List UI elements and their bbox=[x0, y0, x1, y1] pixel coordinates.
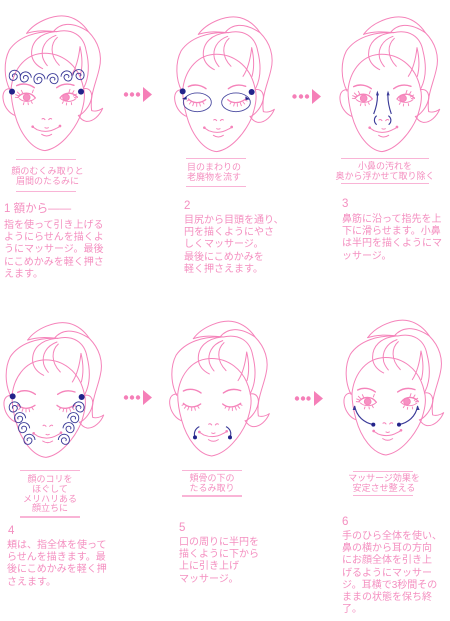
face 6: lift massage bbox=[344, 320, 444, 455]
step 5 text: 上に引き上げ bbox=[179, 561, 239, 572]
panel 5 caption bbox=[182, 470, 242, 497]
step 5 text: マッサージ。 bbox=[179, 574, 238, 585]
step 1 text: ようにらせんを描くよ bbox=[4, 232, 104, 243]
step 4 text: さえます。 bbox=[7, 577, 56, 588]
step 5 number: 5 bbox=[179, 522, 185, 534]
step 4 text: らせんを描きます。最 bbox=[7, 552, 106, 563]
panel 2 caption: 老廃物を流す bbox=[187, 172, 241, 182]
step 5 text bbox=[179, 536, 259, 585]
step 2 text: 軽く押さえます。 bbox=[184, 264, 263, 275]
step 6 number: 6 bbox=[342, 516, 348, 528]
step 6 text: ジ。耳横で3秒間その bbox=[342, 580, 437, 591]
step 2 text: しくマッサージ。 bbox=[184, 239, 264, 250]
panel 4 caption: 顔立ちに bbox=[32, 503, 68, 513]
step 5 text: 口の周りに半円を bbox=[179, 537, 259, 548]
arrow 1 bbox=[124, 87, 152, 102]
step 4 text: 後にこめかみを軽く押 bbox=[7, 564, 107, 575]
step 6 text: ままの状態を保ち終 bbox=[342, 592, 432, 603]
step 1 text bbox=[4, 219, 104, 280]
panel 1 caption: 眉間のたるみに bbox=[16, 176, 79, 186]
arrow 4 bbox=[295, 391, 323, 406]
step 3 number: 3 bbox=[342, 198, 348, 210]
arrow 2 bbox=[292, 89, 321, 104]
face 1: forehead massage bbox=[3, 16, 103, 151]
step 4 text: 頬は、指全体を使って bbox=[7, 540, 106, 551]
step 4 number: 4 bbox=[8, 525, 14, 537]
step 1 text: えます。 bbox=[4, 269, 43, 280]
step 2 text: 最後にこめかみを bbox=[184, 252, 264, 263]
step 3 text: ッサージ。 bbox=[342, 251, 392, 262]
panel 1 caption: 顔のむくみ取りと bbox=[11, 166, 84, 176]
step 1 number: 1 額から―― bbox=[4, 203, 71, 215]
face 2: eye massage bbox=[175, 17, 274, 152]
panel 4 caption: ほぐして bbox=[32, 484, 68, 494]
panel 3 caption: 奥から浮かせて取り除く bbox=[335, 171, 434, 181]
step 3 text: 下に滑らせます。小鼻 bbox=[342, 226, 441, 237]
step 5 text: 描くように下から bbox=[179, 549, 259, 560]
step 3 text bbox=[342, 213, 442, 262]
spirals and pressure points on forehead bbox=[9, 70, 84, 95]
step 6 text bbox=[342, 530, 442, 615]
panel 6 caption bbox=[348, 471, 420, 496]
step 4 text bbox=[7, 539, 107, 588]
step 2 number: 2 bbox=[184, 200, 190, 212]
panel 1 caption bbox=[11, 159, 84, 192]
arrow 3 bbox=[124, 390, 152, 405]
face 4: cheek massage bbox=[4, 323, 104, 457]
step 6 text: にお顔全体を引き上 bbox=[342, 555, 432, 566]
step 2 text bbox=[184, 214, 284, 275]
lift arcs bbox=[353, 405, 420, 427]
mouth arcs bbox=[193, 427, 232, 439]
step 6 text: 了。 bbox=[342, 604, 362, 615]
step 2 text: 目尻から目頭を通り、 bbox=[184, 215, 284, 226]
step 3 text: 鼻筋に沿って指先を上 bbox=[342, 214, 442, 225]
panel 5 caption: 頬骨の下の bbox=[189, 473, 234, 483]
panel 6 caption: 安定させ整える bbox=[353, 483, 415, 493]
step 6 text: 手のひら全体を使い、 bbox=[342, 531, 442, 542]
cheek spirals and pressure points bbox=[9, 393, 85, 444]
panel 4 caption: メリハリある bbox=[23, 494, 77, 504]
panel 4 caption: 顔のコリを bbox=[27, 474, 72, 484]
step 1 text: にこめかみを軽く押さ bbox=[4, 257, 104, 268]
panel 3 caption bbox=[335, 158, 434, 184]
step 1 text: うにマッサージ。最後 bbox=[4, 244, 104, 255]
panel 5 caption: たるみ取り bbox=[189, 483, 234, 493]
nose arrows bbox=[374, 91, 391, 125]
panel 2 caption: 目のまわりの bbox=[187, 162, 241, 172]
circles around the eyes bbox=[180, 88, 255, 112]
panel 2 caption bbox=[186, 158, 246, 187]
panel 4 caption bbox=[20, 470, 80, 518]
step 6 text: げるようにマッサー bbox=[342, 568, 432, 579]
step 2 text: 円を描くようにやさ bbox=[184, 227, 274, 238]
panel 3 caption: 小鼻の汚れを bbox=[358, 161, 412, 171]
step 3 text: は半円を描くようにマ bbox=[342, 238, 442, 249]
step 1 text: 指を使って引き上げる bbox=[4, 220, 104, 231]
face 3: nose massage bbox=[340, 17, 440, 152]
panel 6 caption: マッサージ効果を bbox=[348, 473, 420, 483]
face 5: mouth massage bbox=[170, 321, 269, 456]
step 6 text: 鼻の横から耳の方向 bbox=[342, 543, 432, 554]
